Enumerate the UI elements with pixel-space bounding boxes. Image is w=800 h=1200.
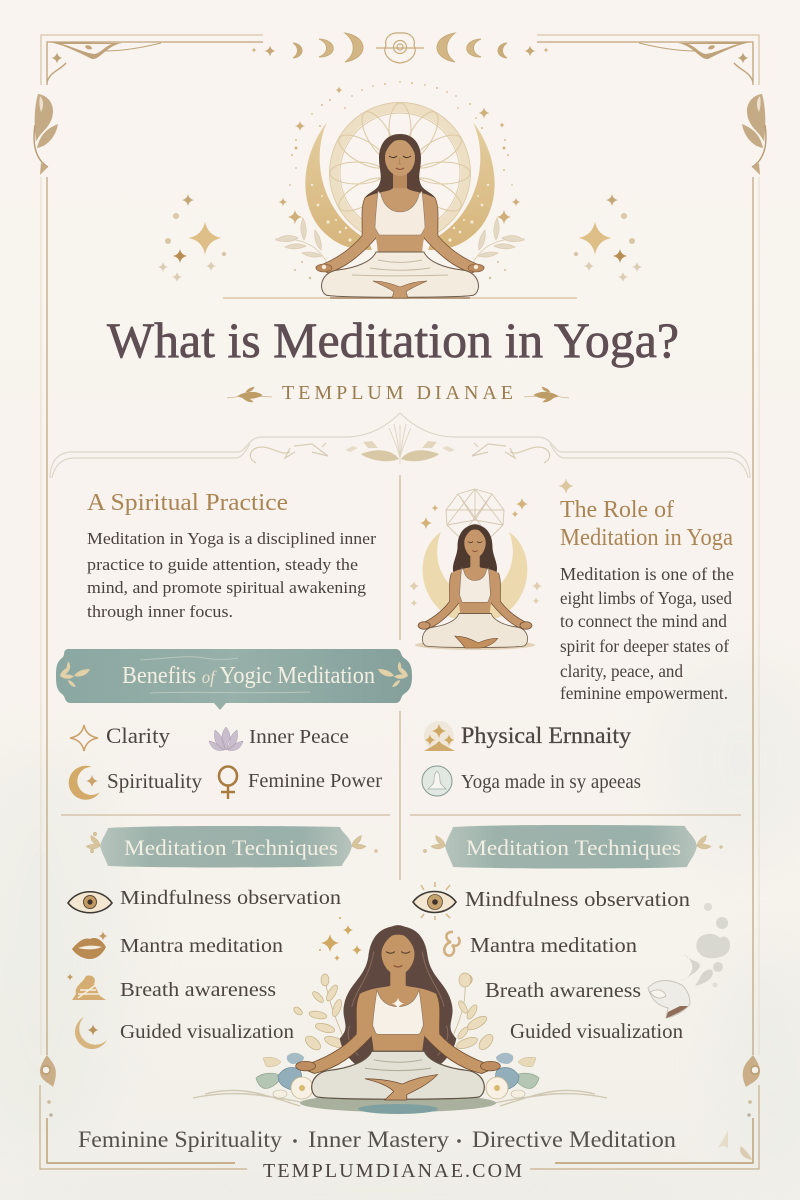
technique: guided right: Guided visualization <box>510 1019 683 1043</box>
crescent specks <box>311 184 489 242</box>
right crescent <box>428 122 495 250</box>
benefit: clarity: Clarity <box>106 723 170 748</box>
benefit: clarity <box>70 723 170 751</box>
body text: feminine empowerment. <box>560 683 728 703</box>
banner scroll right <box>378 662 410 689</box>
body text: through inner focus. <box>87 602 233 621</box>
subtitle with leaves: TEMPLUM DIANAE <box>282 382 513 404</box>
stars near head <box>319 917 362 961</box>
technique: mindfulness right: Mindfulness observation <box>465 887 691 911</box>
body text: clarity, peace, and <box>560 661 683 681</box>
body text <box>87 529 376 621</box>
heading: Meditation in Yoga <box>560 525 733 551</box>
title: What is Meditation in Yoga? <box>107 312 679 368</box>
body text: to connect the mind and <box>560 611 727 631</box>
benefit: spirituality <box>69 766 203 800</box>
decorative section arch <box>50 413 750 478</box>
stars around hero <box>279 86 520 224</box>
benefit: yoga <box>422 766 641 796</box>
small woman <box>418 524 532 648</box>
benefit: feminine power <box>219 766 382 799</box>
body text: mind, and promote spiritual awakening <box>87 578 367 597</box>
body text: practice to guide attention, steady the <box>87 555 358 574</box>
frame corner: top right <box>639 42 753 82</box>
right sprig <box>473 218 525 263</box>
moon phase strip <box>251 33 549 63</box>
benefit: inner peace: Inner Peace <box>249 726 349 748</box>
right flowers <box>486 1053 539 1099</box>
right leaves <box>448 973 496 1052</box>
body text: Meditation in Yoga is a disciplined inner <box>87 529 376 548</box>
left sparkle cluster <box>158 194 226 282</box>
heading: A Spiritual Practice <box>87 490 288 516</box>
breath shell and smoke <box>648 903 730 1018</box>
panel: the role of meditation <box>560 497 734 703</box>
benefit: physical <box>424 721 632 751</box>
horizontal dividers <box>61 814 741 816</box>
technique: mindfulness right <box>413 882 691 920</box>
meditating woman with long hair <box>296 925 500 1100</box>
benefit: yoga: Yoga made in sy apeeas <box>461 772 641 793</box>
water waves <box>193 1090 607 1112</box>
technique: guided <box>75 1017 294 1049</box>
gold dust <box>289 81 513 279</box>
footer tagline: Directive Meditation <box>472 1127 677 1152</box>
small moon <box>423 532 527 618</box>
benefit: inner peace <box>209 726 349 751</box>
footer tagline <box>78 1127 677 1152</box>
bottom flourish: left <box>40 1055 56 1117</box>
technique: breath: Breath awareness <box>120 979 276 1001</box>
banner: techniques left <box>86 826 377 868</box>
small meditating illustration <box>409 478 574 650</box>
body text: eight limbs of Yoga, used <box>560 588 732 608</box>
meditating woman <box>316 134 484 298</box>
technique: mantra <box>72 932 283 959</box>
mandala halo <box>330 102 470 244</box>
technique: breath right: Breath awareness <box>485 978 641 1002</box>
technique: mantra right: Mantra meditation <box>470 933 638 957</box>
ground line <box>223 297 577 299</box>
technique: mindfulness <box>68 887 341 913</box>
body text <box>560 564 734 703</box>
left flowers <box>256 1053 313 1099</box>
leaf right of subtitle <box>524 387 569 402</box>
footer tagline: Feminine Spirituality <box>78 1127 283 1152</box>
frame corner: top left <box>47 42 161 82</box>
techniques list left <box>66 887 341 1049</box>
leaf ornament: left <box>34 94 58 175</box>
ground pool <box>300 1094 496 1112</box>
footer tagline: Inner Mastery <box>308 1127 450 1152</box>
subtitle with leaves <box>227 382 569 404</box>
left crescent <box>305 122 372 250</box>
heading <box>560 497 733 551</box>
banner text: Benefits of Yogic Meditation <box>122 663 375 689</box>
banner scroll left <box>58 662 90 689</box>
small ground shadow <box>415 640 535 650</box>
panel: a spiritual practice <box>87 490 376 621</box>
small mandala <box>446 489 504 538</box>
sprig decoration <box>424 836 722 852</box>
left sprig <box>275 218 327 263</box>
small stars <box>409 478 574 606</box>
bottom flourish: right <box>718 1055 760 1160</box>
banner text: Meditation Techniques <box>124 835 338 860</box>
footer website: TEMPLUMDIANAE.COM <box>263 1160 522 1182</box>
technique: breath <box>66 974 276 1001</box>
technique: mindfulness: Mindfulness observation <box>120 887 341 909</box>
body text: spirit for deeper states of <box>560 636 729 656</box>
benefit: physical: Physical Ernnaity <box>461 723 632 748</box>
banner: techniques right <box>424 825 722 868</box>
sprig decoration <box>86 832 377 853</box>
banner text: Meditation Techniques <box>466 835 681 860</box>
left leaves <box>292 974 348 1053</box>
hero illustration <box>223 81 577 298</box>
bottom illustration <box>193 917 607 1114</box>
centre divider <box>399 475 401 880</box>
benefits list <box>69 721 641 800</box>
leaf ornament: right <box>742 94 766 175</box>
techniques list right <box>413 882 730 1043</box>
arch centre ornament <box>250 424 550 464</box>
leaf left of subtitle <box>227 387 272 402</box>
technique: guided: Guided visualization <box>120 1021 294 1043</box>
moon strip centre emblem <box>376 33 424 63</box>
banner: benefits <box>56 649 412 710</box>
benefit: spirituality: Spirituality <box>107 769 203 793</box>
technique: breath right <box>462 903 730 1018</box>
technique: mantra: Mantra meditation <box>120 935 283 957</box>
benefit: feminine power: Feminine Power <box>248 770 382 792</box>
heading: The Role of <box>560 497 674 523</box>
body text: Meditation is one of the <box>560 564 734 584</box>
right sparkle cluster <box>574 194 642 282</box>
